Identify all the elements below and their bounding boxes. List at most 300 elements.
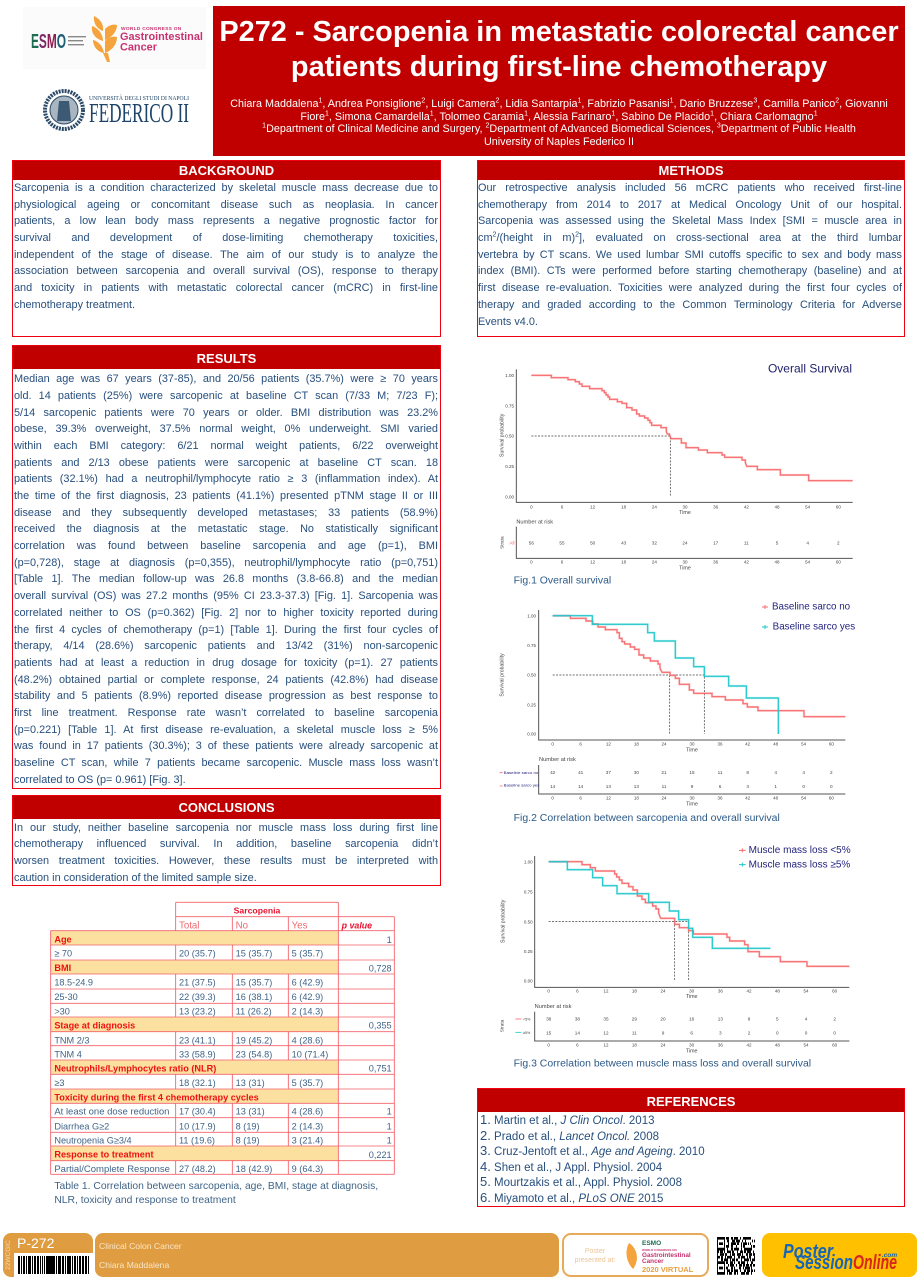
logo wordmark (783, 1241, 897, 1274)
risk x axis labels: 60 (832, 1043, 838, 1048)
x axis labels: 0 (530, 504, 533, 509)
footer: poster id tab (3, 1233, 93, 1277)
risk x axis labels (530, 560, 841, 571)
risk table: 56 (529, 540, 534, 545)
curve: muscle loss below 5 percent (549, 862, 849, 966)
y axis labels: Survival probability (499, 413, 505, 457)
risk x axis labels: 18 (632, 1043, 637, 1048)
risk table: 0 (830, 784, 833, 789)
risk x axis labels: 30 (682, 560, 688, 565)
panel: conclusions (12, 795, 441, 886)
authors and affiliations: Fiore1, Simona Camardella1, Tolomeo Caramia1, Alessia Farinaro1, Sabino De Placido1, Chiara Carlomagno1 (300, 110, 818, 123)
table values: 18.5-24.9 (54, 978, 93, 988)
heading: conclusions: CONCLUSIONS (178, 800, 275, 815)
text: conclusions: chemotherapy influenced survival. In addition, baseline sarcopenia didn’t (14, 838, 438, 850)
table values: ≥ 70 (54, 949, 72, 959)
axes (516, 369, 853, 502)
table header: p value (341, 920, 372, 930)
x axis labels: 48 (774, 504, 780, 509)
text: background: independent of the stage of disease. The aim of our study is to analyze the (14, 249, 438, 261)
table header: Sarcopenia (234, 906, 281, 916)
risk x axis labels: 48 (775, 1043, 780, 1048)
figure 2: sarcopenia and overall survival (499, 602, 855, 824)
risk table: 11 (744, 540, 749, 545)
table header (179, 906, 372, 931)
table values: 6 (42.9) (292, 992, 323, 1002)
legend: Baseline sarco yes (773, 622, 855, 633)
vertical congress code: 22WCGIC (5, 1240, 12, 1270)
table caption (54, 1181, 378, 1206)
text: methods (478, 182, 902, 328)
legend: Baseline sarco no (772, 602, 851, 613)
risk table: 5 (776, 540, 779, 545)
table values: 8 (19) (236, 1136, 260, 1146)
table values: 11 (26.2) (236, 1007, 272, 1017)
heading: methods (478, 161, 904, 180)
text: background (14, 182, 438, 311)
text: results (14, 373, 438, 786)
risk table: 8 (748, 1017, 751, 1022)
text: references: 2. Prado et al., Lancet Oncol. 2008 (480, 1128, 659, 1143)
text: references: 3. Cruz-Jentoft et al., Age and Ageing. 2010 (480, 1143, 705, 1158)
table values: Partial/Complete Response (54, 1164, 170, 1175)
risk x axis labels: 36 (718, 1043, 723, 1048)
x axis labels: 42 (746, 989, 752, 994)
table values: 27 (48.2) (179, 1164, 216, 1174)
risk x axis labels: 0 (551, 795, 554, 800)
table values: 2 (14.3) (292, 1007, 323, 1017)
mini congress text: Cancer (642, 1258, 664, 1265)
risk x axis labels: 30 (689, 795, 695, 800)
risk table: Strata (499, 536, 504, 549)
logo text: congress name (120, 26, 203, 54)
risk x axis labels: 24 (661, 795, 667, 800)
figure caption: Fig.3 Correlation between muscle mass loss and overall survival (514, 1059, 811, 1070)
risk x axis labels: 48 (774, 560, 780, 565)
heading: results: RESULTS (197, 351, 256, 366)
table values: 23 (54.8) (236, 1050, 272, 1060)
icon: orange wheat leaf (92, 16, 117, 62)
y axis labels: 0.25 (524, 949, 533, 954)
risk table: 11 (662, 784, 667, 789)
risk table: 2 (830, 770, 833, 775)
authors and affiliations: Chiara Maddalena1, Andrea Ponsiglione2, Luigi Camera2, Lidia Santarpia1, Fabrizio Pasanisi1, Dario Bruzzese3, Camilla Panico2, Giovanni (230, 97, 888, 110)
risk table: 15 (689, 770, 695, 775)
risk table: Baseline sarco no (504, 770, 539, 775)
legend (762, 602, 855, 633)
table values: 5 (35.7) (292, 1078, 323, 1088)
risk table: 32 (652, 540, 657, 545)
risk table: 2 (748, 1031, 751, 1036)
table values: 22 (39.3) (179, 992, 216, 1002)
y axis labels (499, 373, 514, 499)
x axis labels: 24 (661, 741, 667, 746)
text: references: 6. Miyamoto et al., PLoS ONE 2015 (480, 1190, 663, 1205)
panel: background (12, 160, 441, 337)
survival curve (531, 375, 853, 481)
risk table: 38 (575, 1017, 580, 1022)
risk table: 11 (632, 1031, 637, 1036)
text: background: chemotherapy treatment. (14, 299, 135, 311)
risk x axis labels (547, 1043, 838, 1054)
x axis labels: 6 (561, 504, 564, 509)
table header: Yes (292, 920, 308, 931)
table values: At least one dose reduction (54, 1107, 169, 1118)
number at risk heading: Number at risk (535, 1004, 572, 1010)
logo wordmark: Poster (783, 1241, 834, 1263)
risk table: 50 (590, 540, 596, 545)
category: Clinical Colon Cancer (99, 1241, 182, 1251)
risk table: 4 (774, 770, 777, 775)
table values: TNM 2/3 (54, 1035, 89, 1045)
x axis labels: 30 (689, 741, 695, 746)
curve: muscle loss 5 percent or more (549, 862, 770, 948)
x axis labels: 42 (744, 504, 749, 509)
text: conclusions: caution in consideration of the limited sample size. (14, 872, 257, 884)
table caption: Table 1. Correlation between sarcopenia, age, BMI, stage at diagnosis, (54, 1181, 378, 1192)
section labels: Response to treatment (54, 1150, 154, 1160)
legend: Muscle mass loss <5% (749, 845, 851, 856)
table values: 10 (71.4) (292, 1050, 328, 1060)
risk x axis labels: 42 (746, 1043, 752, 1048)
text: methods: Sarcopenia was assessed using the Skeletal Mass Index [SMI = muscle area in (478, 215, 902, 227)
legend (739, 845, 851, 870)
risk x axis labels: 30 (689, 1043, 695, 1048)
table values: 23 (41.1) (179, 1035, 216, 1045)
risk table: 4 (805, 1017, 808, 1022)
risk table axes (516, 527, 853, 558)
y axis labels: 0.75 (524, 889, 533, 894)
x axis labels: 30 (682, 504, 688, 509)
risk table: 20 (660, 1017, 666, 1022)
risk x axis labels: Time (686, 801, 698, 807)
table values: 18 (42.9) (236, 1164, 272, 1174)
text: background: physiological ageing or concomitant disease such as neoplasia. In cancer (14, 199, 438, 211)
text: results: first line treatment. Response rate wasn’t correlated to baseline sarcopenia (14, 707, 438, 719)
risk table: 17 (713, 540, 719, 545)
p values: 1 (387, 1107, 392, 1117)
x axis labels: 54 (801, 741, 807, 746)
x axis labels: Time (686, 994, 698, 1000)
section labels (54, 935, 259, 1160)
risk table: 4 (802, 770, 805, 775)
risk table: 13 (606, 784, 611, 789)
risk table: 43 (621, 540, 627, 545)
p values: 0,728 (369, 963, 392, 973)
x axis labels: 12 (603, 989, 609, 994)
text: results: within each BMI category: 6/21 normal weight patients, 6/22 overweight (14, 440, 438, 452)
congress mini logo (626, 1240, 694, 1274)
logo wordmark: Session (795, 1252, 853, 1274)
text: results: correlation was found between baseline sarcopenia and age (p=1), BMI (14, 540, 438, 552)
section row shading (51, 931, 338, 1161)
y axis labels: 0.50 (505, 434, 514, 439)
table values: 3 (21.4) (292, 1136, 323, 1146)
text: references: 1. Martin et al., J Clin Oncol. 2013 (480, 1112, 654, 1127)
risk x axis labels: 60 (836, 560, 841, 565)
risk table: 21 (661, 770, 667, 775)
presenter: Chiara Maddalena (99, 1260, 169, 1270)
title: patients during first-line chemotherapy (291, 51, 827, 83)
x axis labels: 42 (745, 741, 751, 746)
risk table: 2 (833, 1017, 836, 1022)
y axis labels: 0.00 (527, 732, 536, 737)
table header: Total (179, 920, 199, 931)
table grid (51, 902, 394, 1174)
mini congress text (642, 1248, 694, 1274)
text: conclusions: worsen treatment toxicities. However, these results must be interpreted with (14, 855, 438, 867)
x axis labels: 36 (717, 741, 723, 746)
risk table: 15 (546, 1031, 552, 1036)
table values: 13 (31) (236, 1078, 265, 1088)
x axis labels: 48 (773, 741, 779, 746)
section labels: Age (54, 935, 72, 945)
y axis labels: 0.75 (505, 403, 514, 408)
x axis labels: 54 (805, 504, 811, 509)
risk x axis labels: 6 (561, 560, 564, 565)
table values: 33 (58.9) (179, 1050, 216, 1060)
risk table: 16 (689, 1017, 695, 1022)
table caption: NLR, toxicity and response to treatment (54, 1195, 236, 1206)
risk x axis labels: 54 (803, 1043, 809, 1048)
x axis labels (547, 989, 838, 1000)
text: results: (p=0,728), stage at diagnosis (p=0,355), neutrophil/lymphocyte ratio (p=0,751) (14, 557, 438, 569)
text: references: 4. Shen et al., J Appl. Physiol. 2004 (480, 1159, 662, 1174)
risk table: 38 (546, 1017, 552, 1022)
y axis labels: 1.00 (527, 613, 536, 618)
risk table: 9 (662, 1031, 665, 1036)
risk x axis labels: 6 (576, 1043, 579, 1048)
risk table (499, 1017, 836, 1036)
figure caption: Fig.1 Overall survival (514, 576, 611, 587)
x axis labels: 24 (660, 989, 666, 994)
y axis labels: Survival probability (499, 653, 505, 697)
poster number: P-272 (17, 1235, 54, 1251)
presented at label (575, 1248, 615, 1264)
chart title: Overall Survival (768, 361, 852, 375)
heading: results (13, 346, 440, 369)
risk table: Baseline sarco yes (504, 783, 539, 788)
risk table axes (539, 765, 845, 794)
y axis labels: 0.00 (505, 494, 514, 499)
y axis labels: 1.00 (524, 859, 533, 864)
section labels: BMI (54, 963, 71, 973)
risk table (500, 770, 833, 789)
x axis labels: 12 (590, 504, 596, 509)
curve: sarcopenia (553, 616, 778, 734)
risk x axis labels: 0 (547, 1043, 550, 1048)
text: results: Median age was 67 years (37-85), and 20/56 patients (35.7%) were ≥ 70 years (14, 373, 438, 385)
y axis labels (499, 613, 536, 737)
text: results: old. 14 patients (25%) were sarcopenic at baseline CT scan (7/33 M; 7/23 F); (14, 390, 438, 402)
heading: methods: METHODS (658, 163, 724, 178)
text: results: was found in 17 patients (30.3%); 3 of these patients were already sarcopenic at (14, 740, 438, 752)
risk x axis labels: Time (686, 1048, 698, 1054)
p values: 1 (387, 935, 392, 945)
text: methods: index (BMI). CTs were performed before starting chemotherapy (baseline) and at (478, 265, 902, 277)
x axis labels: 30 (689, 989, 695, 994)
risk x axis labels: 12 (603, 1043, 609, 1048)
x axis labels (551, 741, 834, 753)
x axis labels: 12 (606, 741, 611, 746)
risk table: 13 (634, 784, 639, 789)
risk x axis labels: 12 (606, 795, 611, 800)
y axis labels: 1.00 (505, 373, 514, 378)
text: results: the first 4 cycles of chemotherapy (p=1) [Table 1]. During the first four cycles of (14, 624, 438, 636)
mini wheat leaf (626, 1243, 637, 1269)
text: conclusions (14, 822, 438, 884)
panel: results (12, 345, 441, 789)
figure 1: overall survival (499, 361, 853, 587)
risk table: 1 (774, 784, 777, 789)
legend: Muscle mass loss ≥5% (749, 859, 850, 870)
x axis labels: 0 (551, 741, 554, 746)
text: methods: Events v4.0. (478, 316, 538, 328)
table values: 4 (28.6) (292, 1107, 323, 1117)
table 1: sarcopenia correlations (50, 902, 395, 1206)
x axis labels: 36 (713, 504, 719, 509)
risk table: 30 (634, 770, 639, 775)
risk x axis labels: Time (679, 565, 691, 571)
y axis labels: 0.00 (524, 979, 533, 984)
risk x axis labels: 60 (829, 795, 834, 800)
mini ESMO mark: ESMO (642, 1240, 661, 1247)
x axis labels: 60 (836, 504, 841, 509)
y axis labels: 0.75 (527, 643, 536, 648)
table values: 11 (19.6) (179, 1136, 215, 1146)
footer: PosterSessionOnline logo (762, 1233, 917, 1277)
heading: references: REFERENCES (647, 1094, 735, 1109)
text: background: Sarcopenia is a condition characterized by skeletal muscle mass decrease due to (14, 182, 438, 194)
risk table: 42 (550, 770, 556, 775)
x axis labels: 60 (829, 741, 834, 746)
heading: background: BACKGROUND (179, 163, 274, 178)
section labels: Neutrophils/Lymphocytes ratio (NLR) (54, 1063, 216, 1073)
p values: 0,221 (369, 1150, 392, 1160)
curve: no sarcopenia (553, 616, 845, 717)
mini congress text: Gastrointestinal (642, 1252, 691, 1259)
risk x axis labels: 18 (621, 560, 627, 565)
table values: 15 (35.7) (236, 978, 272, 988)
table values: 2 (14.3) (292, 1121, 323, 1131)
logo text: university name: UNIVERSITÀ DEGLI STUDI DI NAPOLI (89, 94, 189, 102)
table values: 10 (17.9) (179, 1121, 216, 1131)
text: conclusions: In our study, neither baseline sarcopenia nor muscle mass loss during first line (14, 822, 438, 834)
header banner (213, 6, 905, 156)
logo text: congress name: Cancer (120, 42, 158, 54)
logo text: congress name: WORLD CONGRESS ON (121, 26, 182, 32)
logo text: university name: FEDERICO II (89, 98, 189, 128)
risk x axis labels: 6 (579, 795, 582, 800)
risk x axis labels: 54 (801, 795, 807, 800)
table values: 16 (38.1) (236, 992, 272, 1002)
text: background: survival and development of dose-limiting chemotherapy toxicities, (14, 232, 438, 244)
risk table: 35 (603, 1017, 609, 1022)
p values: 1 (387, 1121, 392, 1131)
risk table (499, 536, 840, 549)
y axis labels: 0.25 (505, 464, 514, 469)
y axis labels: 0.50 (527, 673, 536, 678)
table values: ≥3 (54, 1078, 64, 1088)
text: results: patients and 2/13 obese patients were sarcopenic at baseline CT scan. 18 (14, 457, 438, 469)
text: results: the time of the first diagnosis, 23 patients (41.1%) presented pTNM stage II or III (14, 490, 438, 502)
risk table: 14 (578, 784, 584, 789)
footer: presented at badge (562, 1233, 709, 1277)
table values: 18 (32.1) (179, 1078, 216, 1088)
risk table: 55 (559, 540, 565, 545)
risk table: 6 (719, 784, 722, 789)
table values: TNM 4 (54, 1050, 82, 1060)
risk table: 41 (578, 770, 584, 775)
text: results: patients had at least a reduction in drug dosage for toxicity (p=1). 27 patients (14, 657, 438, 669)
x axis labels: 0 (547, 989, 550, 994)
risk x axis labels: 48 (773, 795, 779, 800)
text: background: patients, a low lean body mass represents a negative prognostic factor for (14, 215, 438, 227)
figure caption: Fig.2 Correlation between sarcopenia and overall survival (514, 813, 780, 824)
risk table: 3 (746, 784, 749, 789)
text: methods: vertebra by CT scans. We used lumbar SMI cutoffs specific to sex and body mass (478, 249, 902, 261)
risk table: Strata (499, 1019, 504, 1032)
risk table: 4 (806, 540, 809, 545)
figure 3: muscle mass loss and overall survival (499, 845, 851, 1070)
risk x axis labels: 42 (744, 560, 749, 565)
text: results: therapy, 4/14 (28.6%) sarcopenic patients and 13/42 (31%) non-sarcopenic (14, 640, 438, 652)
risk x axis labels: 36 (713, 560, 719, 565)
risk table: 29 (632, 1017, 637, 1022)
table values (54, 949, 328, 1175)
risk table: 0 (805, 1031, 808, 1036)
logo text: university name (89, 94, 189, 128)
risk table: 37 (606, 770, 611, 775)
heading: conclusions (13, 796, 440, 819)
table values: 19 (45.2) (236, 1035, 272, 1045)
text: methods: therapy and graded according to the Common Terminology Criteria for Adverse (478, 299, 902, 311)
risk table axes (535, 1012, 849, 1041)
x axis labels: 24 (652, 504, 657, 509)
authors and affiliations: 1Department of Clinical Medicine and Surgery, 2Department of Advanced Biomedical Sciences, 3Department of Public Health (262, 123, 856, 135)
table values: 5 (35.7) (292, 949, 323, 959)
text: background: and toxicity in patients with metastatic colorectal cancer (mCRC) in first-line (14, 282, 438, 294)
p values: 0,355 (369, 1021, 392, 1031)
text: results: overall survival (OS) was 27.2 months (95% CI 23.3-37.3) [Fig. 1]. Sarcopenia was (14, 590, 438, 602)
table values: 17 (30.4) (179, 1107, 216, 1117)
risk table: 14 (550, 784, 556, 789)
text: methods: chemotherapy from 2014 to 2017 at Medical Oncology Unit of our hospital. (478, 199, 902, 211)
text: results: disease and they subsequently developed metastases; 33 patients (58.9%) (14, 507, 438, 519)
text: methods: Our retrospective analysis included 56 mCRC patients who received first-line (478, 182, 902, 194)
logo wordmark: Online (853, 1252, 897, 1274)
title: P272 - Sarcopenia in metastatic colorectal cancer (219, 16, 899, 48)
x axis title: Time (679, 510, 691, 516)
section labels: Stage at diagnosis (54, 1020, 135, 1030)
logo wordmark: .com (882, 1252, 897, 1259)
axes (535, 856, 849, 987)
text: results: (48.2%) obtained partial or complete response, 24 patients (42.8%) had disease (14, 674, 438, 686)
median survival guide (531, 436, 670, 497)
table values: 21 (37.5) (179, 978, 216, 988)
risk table: 2 (837, 540, 840, 545)
y axis labels: 0.50 (524, 919, 533, 924)
table values: 9 (64.3) (292, 1164, 323, 1174)
text: methods: first disease re-evaluation. Toxicities were analyzed during the first four cycles of (478, 282, 902, 294)
table values: Diarrhea G≥2 (54, 1121, 109, 1131)
footer: QR code (717, 1237, 755, 1275)
table values: 4 (28.6) (292, 1035, 323, 1045)
x axis labels: 48 (775, 989, 780, 994)
y axis labels: 0.25 (527, 702, 536, 707)
risk table: 5 (776, 1017, 779, 1022)
text: methods: cm2/(height in m)2], evaluated on cross-sectional area at the third lumbar (478, 230, 902, 244)
